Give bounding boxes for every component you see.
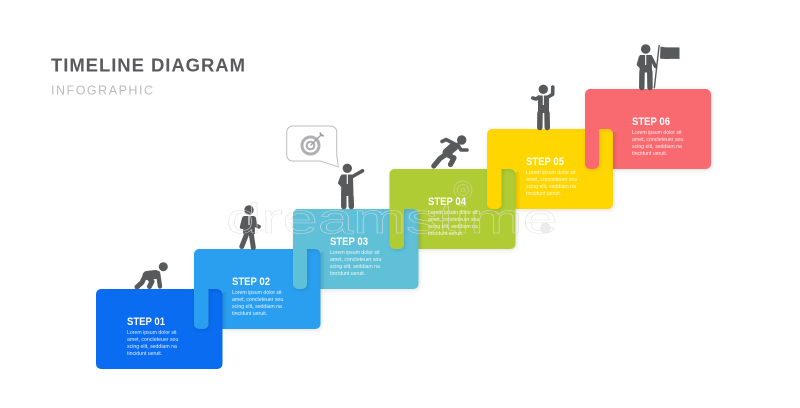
panel: step 01 [96, 289, 222, 369]
panel: step 02: tincidunt ueruit. [232, 311, 267, 317]
panel: step 03: scing elit, seddiam na [330, 264, 380, 270]
panel: step 01: amet, concteteuer sou [127, 337, 178, 343]
icon: target [302, 132, 324, 154]
panel: step 03: Lorem ipsum dolor sit [330, 250, 380, 256]
panel: step 02: amet, concteteuer sou [232, 297, 283, 303]
speech bubble with target icon [287, 126, 338, 167]
panel: step 04 [390, 169, 516, 249]
panel: step 02 [194, 249, 320, 329]
figure: pointing person [340, 164, 362, 206]
panel: step 05: STEP 05 [526, 156, 564, 168]
subtitle: INFOGRAPHIC [51, 84, 153, 98]
panel: step 04: scing elit, seddiam na [428, 224, 478, 230]
panel: step 04: Lorem ipsum dolor sit [428, 210, 478, 216]
watermark [226, 181, 558, 242]
watermark: dreamstime [226, 195, 558, 242]
figure: crawling person [137, 262, 168, 287]
title: TIMELINE DIAGRAM [51, 54, 245, 76]
panel: step 06: scing elit, seddiam na [632, 144, 682, 150]
panel: step 03: amet, concteteuer sou [330, 257, 381, 263]
panel: step 04: tincidunt ueruit. [428, 231, 463, 237]
panel: step 02: Lorem ipsum dolor sit [232, 290, 282, 296]
panel: step 01: scing elit, seddiam na [127, 344, 177, 350]
panel: step 06: STEP 06 [632, 116, 670, 128]
panel: step 02: scing elit, seddiam na [232, 304, 282, 310]
panel: step 05: tincidunt ueruit. [526, 191, 561, 197]
panel: step 03 [293, 209, 418, 289]
figure: waving person [533, 85, 553, 128]
figure: person with flag [638, 44, 680, 88]
panel: step 03: STEP 03 [330, 236, 368, 248]
icon: flag [654, 45, 680, 88]
panel: step 01: STEP 01 [127, 316, 165, 328]
panel: step 05 [487, 129, 613, 209]
panel: step 05: amet, concteteuer sou [526, 177, 577, 183]
panel: step 06: Lorem ipsum dolor sit [632, 130, 682, 136]
figure: running person [434, 135, 467, 166]
panel: step 06 [585, 89, 711, 169]
panel: step 03: tincidunt ueruit. [330, 271, 365, 277]
panel: step 02: STEP 02 [232, 276, 270, 288]
panel: step 01: Lorem ipsum dolor sit [127, 330, 177, 336]
panel: step 06: tincidunt ueruit. [632, 151, 667, 157]
figure: walking person [242, 205, 259, 248]
panel: step 01: tincidunt ueruit. [127, 351, 162, 357]
panel: step 05: scing elit, seddiam na [526, 184, 576, 190]
panel: step 05: Lorem ipsum dolor sit [526, 170, 576, 176]
panel: step 04: STEP 04 [428, 196, 467, 208]
panel: step 04: amet, concteteuer sou [428, 217, 479, 223]
panel: step 06: amet, concteteuer sou [632, 137, 683, 143]
